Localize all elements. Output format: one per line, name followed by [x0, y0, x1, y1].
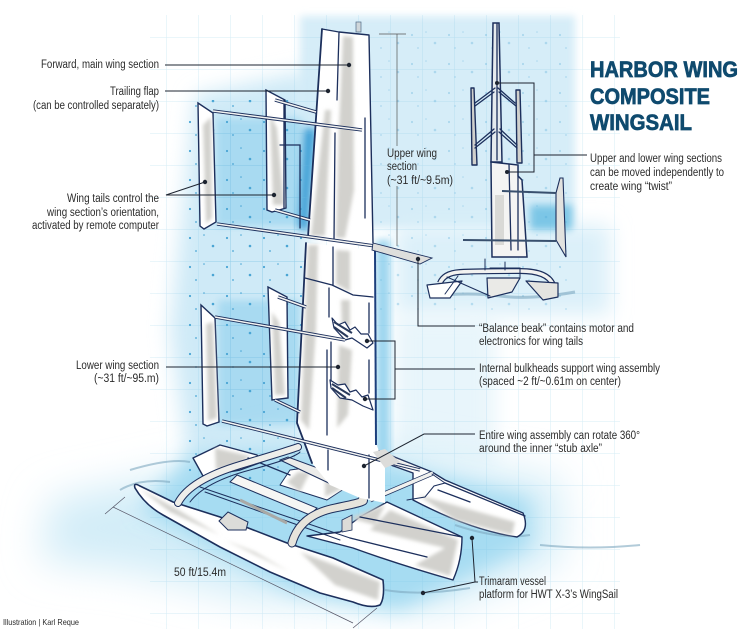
illustration: far hull stern [377, 450, 525, 537]
small lower wing tail and rods [463, 178, 566, 257]
small trimaran [427, 259, 558, 300]
label: upper wing section: (~31 ft/~9.5m) [387, 175, 453, 187]
dimension: vessel length [105, 497, 377, 628]
label: upper wing section: Upper wing [387, 148, 437, 160]
label: trimaran [479, 576, 618, 601]
illustration: lower wing tail rear [268, 287, 306, 412]
label: trimaran: Trimaram vessel [479, 576, 546, 588]
label: wing tails: Wing tails control the [67, 193, 159, 205]
title: HARBOR WING [590, 57, 738, 82]
title: WINGSAIL [590, 110, 692, 135]
label: bulkheads [479, 363, 660, 388]
illustration: upper wing tail rear [266, 90, 316, 228]
leader: balance beak [416, 257, 475, 326]
illustration: centre hull [307, 502, 462, 580]
label: balance beak: electronics for wing tails [479, 336, 583, 348]
label: upper wing section: section [387, 161, 417, 173]
illustration: lower wing tail front [201, 305, 420, 470]
label: wing twist [590, 153, 724, 193]
label: bulkheads: (spaced ~2 ft/~0.61m on center) [479, 376, 621, 388]
label: vessel length: 50 ft/15.4m [174, 567, 226, 579]
label: lower wing section: Lower wing section [76, 360, 159, 372]
label: bulkheads: Internal bulkheads support wing assembly [479, 363, 660, 375]
label: rotation [479, 430, 640, 455]
label: lower wing section [76, 360, 159, 385]
leader: forward wing [165, 63, 351, 67]
leader: wing twist [495, 81, 587, 174]
illustration: internal bulkheads [330, 318, 373, 410]
label: balance beak [479, 323, 634, 348]
leader: lower wing [166, 365, 340, 369]
illustration: balance beak [217, 224, 432, 264]
credit: Illustration | Karl Reque [3, 617, 79, 627]
leader: trimaran [421, 536, 478, 595]
leader: wing tails [166, 180, 276, 197]
small upper wing tails [471, 88, 522, 165]
illustration: cabin dome [280, 467, 347, 500]
illustration: upper wing tail front [198, 103, 362, 229]
label: trailing flap: Trailing flap [110, 86, 159, 98]
illustration: main wing upper section [308, 22, 373, 246]
label: trailing flap [33, 86, 159, 112]
label: rotation: Entire wing assembly can rotate 360° [479, 430, 640, 442]
leader: trailing flap [165, 89, 330, 93]
label: lower wing section: (~31 ft/~95.m) [94, 373, 159, 385]
label: wing tails [32, 193, 159, 232]
watercolor wash and blueprint grid [40, 15, 620, 629]
label: trailing flap: (can be controlled separately) [33, 100, 159, 112]
label: trimaran: platform for HWT X-3’s WingSail [479, 589, 618, 601]
leader: stub axle [362, 434, 475, 468]
small mast upper [491, 23, 502, 162]
title [590, 57, 738, 135]
title: COMPOSITE [590, 84, 710, 109]
small lower wing [491, 162, 527, 257]
illustration: small wingsail view [427, 23, 566, 300]
label: wing tails: activated by remote computer [32, 220, 159, 232]
label: wing twist: create wing “twist” [590, 181, 672, 193]
illustration: rear crossbeam arch [292, 473, 445, 543]
illustration: far hull bow [193, 445, 262, 476]
label: wing twist: Upper and lower wing sections [590, 153, 722, 165]
label: forward main wing section: Forward, main wing section [41, 59, 159, 71]
illustration: near hull (left ama) [135, 484, 384, 606]
illustration: main wing lower section [297, 243, 385, 503]
illustration: water lines [120, 292, 640, 593]
illustration: deck beams [200, 457, 352, 540]
leader: bulkheads [363, 339, 475, 401]
label: wing tails: wing section’s orientation, [46, 207, 159, 219]
label: wing twist: can be moved independently to [590, 167, 724, 179]
label: upper wing section [387, 148, 453, 187]
dimension: upper wing section [379, 34, 406, 246]
illustration: front crossbeam arch [178, 447, 300, 503]
label: balance beak: “Balance beak” contains motor and [479, 323, 634, 335]
label: rotation: around the inner “stub axle” [479, 443, 602, 455]
